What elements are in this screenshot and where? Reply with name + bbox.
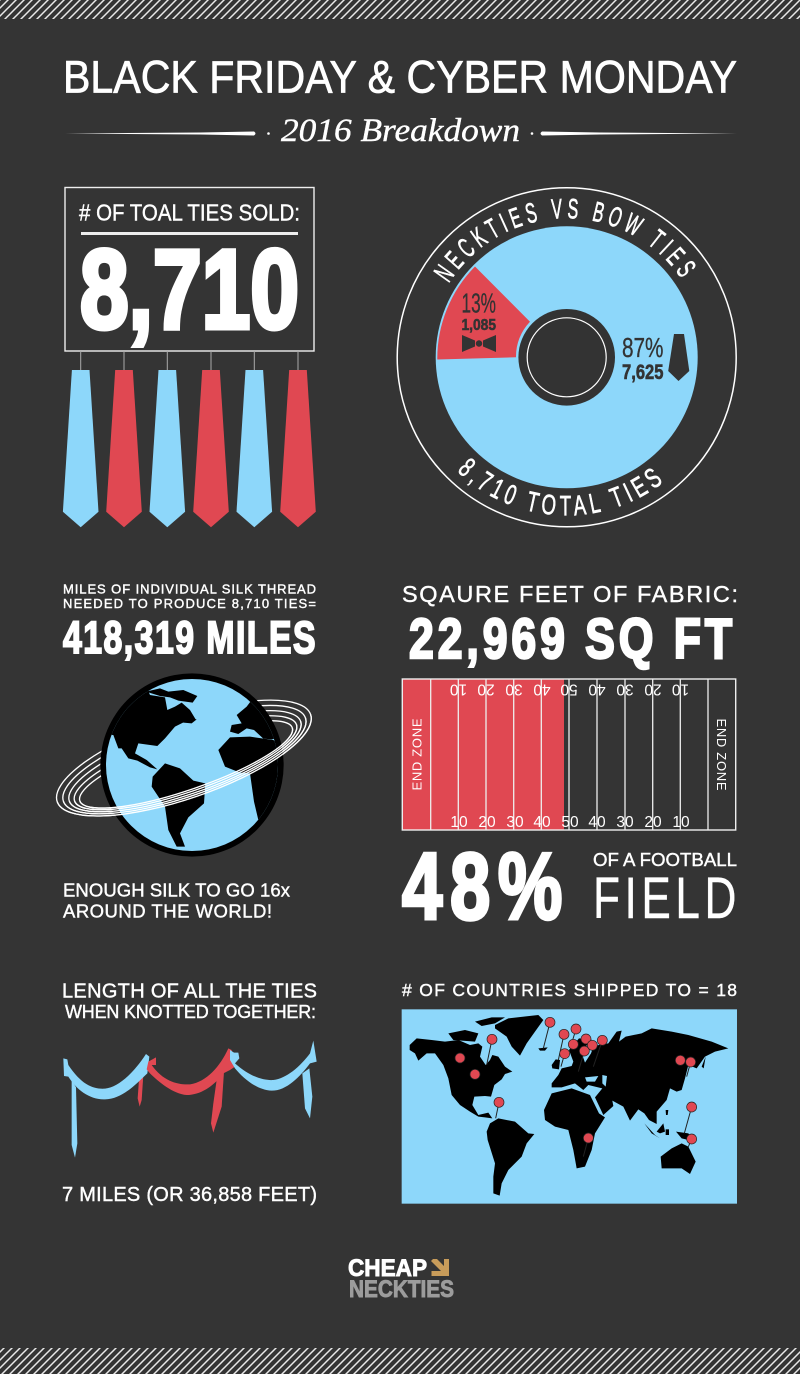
hanging strings: [81, 351, 298, 370]
subtitle with rules: 2016 Breakdown: [281, 113, 520, 149]
number: 8,710: 8,710: [80, 227, 299, 352]
caption: around the world: ENOUGH SILK TO GO 16x: [63, 880, 291, 900]
logo: Cheap Neckties: [348, 1255, 454, 1303]
sign box: [65, 188, 314, 351]
necktie share: 87%: [622, 332, 664, 363]
rings in front of globe: [57, 714, 324, 840]
outer ring: [397, 188, 736, 527]
heading: silk thread: MILES OF INDIVIDUAL SILK THREAD: [63, 582, 316, 596]
bottom yard numbers: 10: [450, 814, 468, 831]
caption: around the world: AROUND THE WORLD!: [63, 900, 272, 922]
subtitle with rules: [65, 113, 737, 149]
bottom yard numbers: 30: [616, 814, 634, 831]
heading: length of ties: LENGTH OF ALL THE TIES: [62, 980, 317, 1002]
caption: of a football field: OF A FOOTBALL: [593, 850, 737, 870]
caption: of a football field: FIELD: [593, 866, 741, 931]
top yard numbers: 40: [533, 680, 551, 698]
top striped band: [0, 0, 800, 19]
rings behind globe: [44, 676, 324, 840]
heading: length of ties: WHEN KNOTTED TOGETHER:: [65, 1002, 316, 1022]
chart: world map with pins: [402, 1009, 737, 1204]
end zone labels: END ZONE: [714, 718, 729, 791]
yard lines: [431, 679, 708, 830]
bow tie share: 1,085: [462, 317, 496, 334]
bottom yard numbers: 40: [588, 814, 606, 831]
filled share: [402, 679, 564, 830]
illustration: globe with silk rings: [44, 673, 324, 857]
bottom yard numbers: 30: [506, 814, 524, 831]
heading: square feet: SQAURE FEET OF FABRIC:: [402, 581, 738, 607]
number: 48 percent: 48%: [402, 834, 570, 940]
icon: bow tie: [462, 335, 496, 352]
top yard numbers: 10: [450, 680, 467, 698]
heading: total ties: # OF TOAL TIES SOLD:: [79, 200, 300, 226]
necktie share: [622, 332, 689, 384]
caption: around the world: [63, 880, 291, 922]
end zone labels: [410, 718, 729, 791]
bottom yard numbers: 50: [561, 814, 579, 831]
ocean: [402, 1009, 737, 1204]
bow tie share: [462, 288, 496, 352]
top yard numbers: [450, 680, 689, 698]
necktie share: 7,625: [622, 361, 664, 384]
continents: [410, 1015, 728, 1196]
blue pie: [436, 226, 698, 488]
heading: countries: # OF COUNTRIES SHIPPED TO = 18: [402, 980, 737, 1000]
rule: [81, 232, 298, 235]
top yard numbers: 30: [505, 680, 523, 698]
bottom yard numbers: 40: [533, 814, 551, 831]
heading: length of ties: [62, 980, 317, 1022]
bow tie share: 13%: [462, 288, 496, 319]
logo: Cheap Neckties: NECKTIES: [349, 1276, 454, 1303]
panel: total ties sold: [63, 188, 316, 527]
top yard numbers: 10: [672, 680, 689, 698]
bottom yard numbers: 10: [672, 814, 690, 831]
centre ring: [527, 318, 606, 397]
caption: of a football field: [593, 850, 741, 931]
red wedge: [437, 266, 530, 360]
heading: silk thread: NEEDED TO PRODUCE 8,710 TIES=: [63, 596, 316, 611]
top yard numbers: 20: [477, 680, 495, 698]
end zone labels: END ZONE: [410, 718, 424, 790]
logo: Cheap Neckties: CHEAP: [348, 1255, 427, 1282]
bottom yard numbers: [450, 814, 690, 831]
bottom yard numbers: 20: [644, 814, 662, 831]
top yard numbers: 40: [588, 680, 606, 698]
curved footer: 8,710 TOTAL TIES: [458, 458, 662, 516]
map pins: [455, 1017, 697, 1157]
hanging ties: [63, 370, 316, 527]
curved heading: NECKTIES VS BOW TIES: [433, 198, 696, 283]
bottom yard numbers: 20: [478, 814, 496, 831]
field outline: [402, 679, 736, 830]
illustration: knotted ties: [63, 1041, 317, 1158]
globe disc: [100, 673, 284, 857]
bottom striped band: [0, 1348, 800, 1374]
title: BLACK FRIDAY & CYBER MONDAY: [63, 52, 737, 102]
icon: necktie: [668, 334, 689, 381]
chart: football field: [402, 679, 736, 831]
top yard numbers: 50: [560, 680, 578, 698]
centre hole: [518, 309, 615, 406]
top yard numbers: 20: [644, 680, 662, 698]
panel: neckties vs bow ties donut: [396, 187, 737, 528]
icon: arrow: [431, 1259, 449, 1276]
caption: 7 miles: 7 MILES (OR 36,858 FEET): [62, 1184, 317, 1206]
heading: silk thread: [63, 582, 316, 611]
top yard numbers: 30: [616, 680, 634, 698]
number: 418,319 miles: 418,319 MILES: [63, 612, 317, 663]
continents: [112, 688, 278, 847]
